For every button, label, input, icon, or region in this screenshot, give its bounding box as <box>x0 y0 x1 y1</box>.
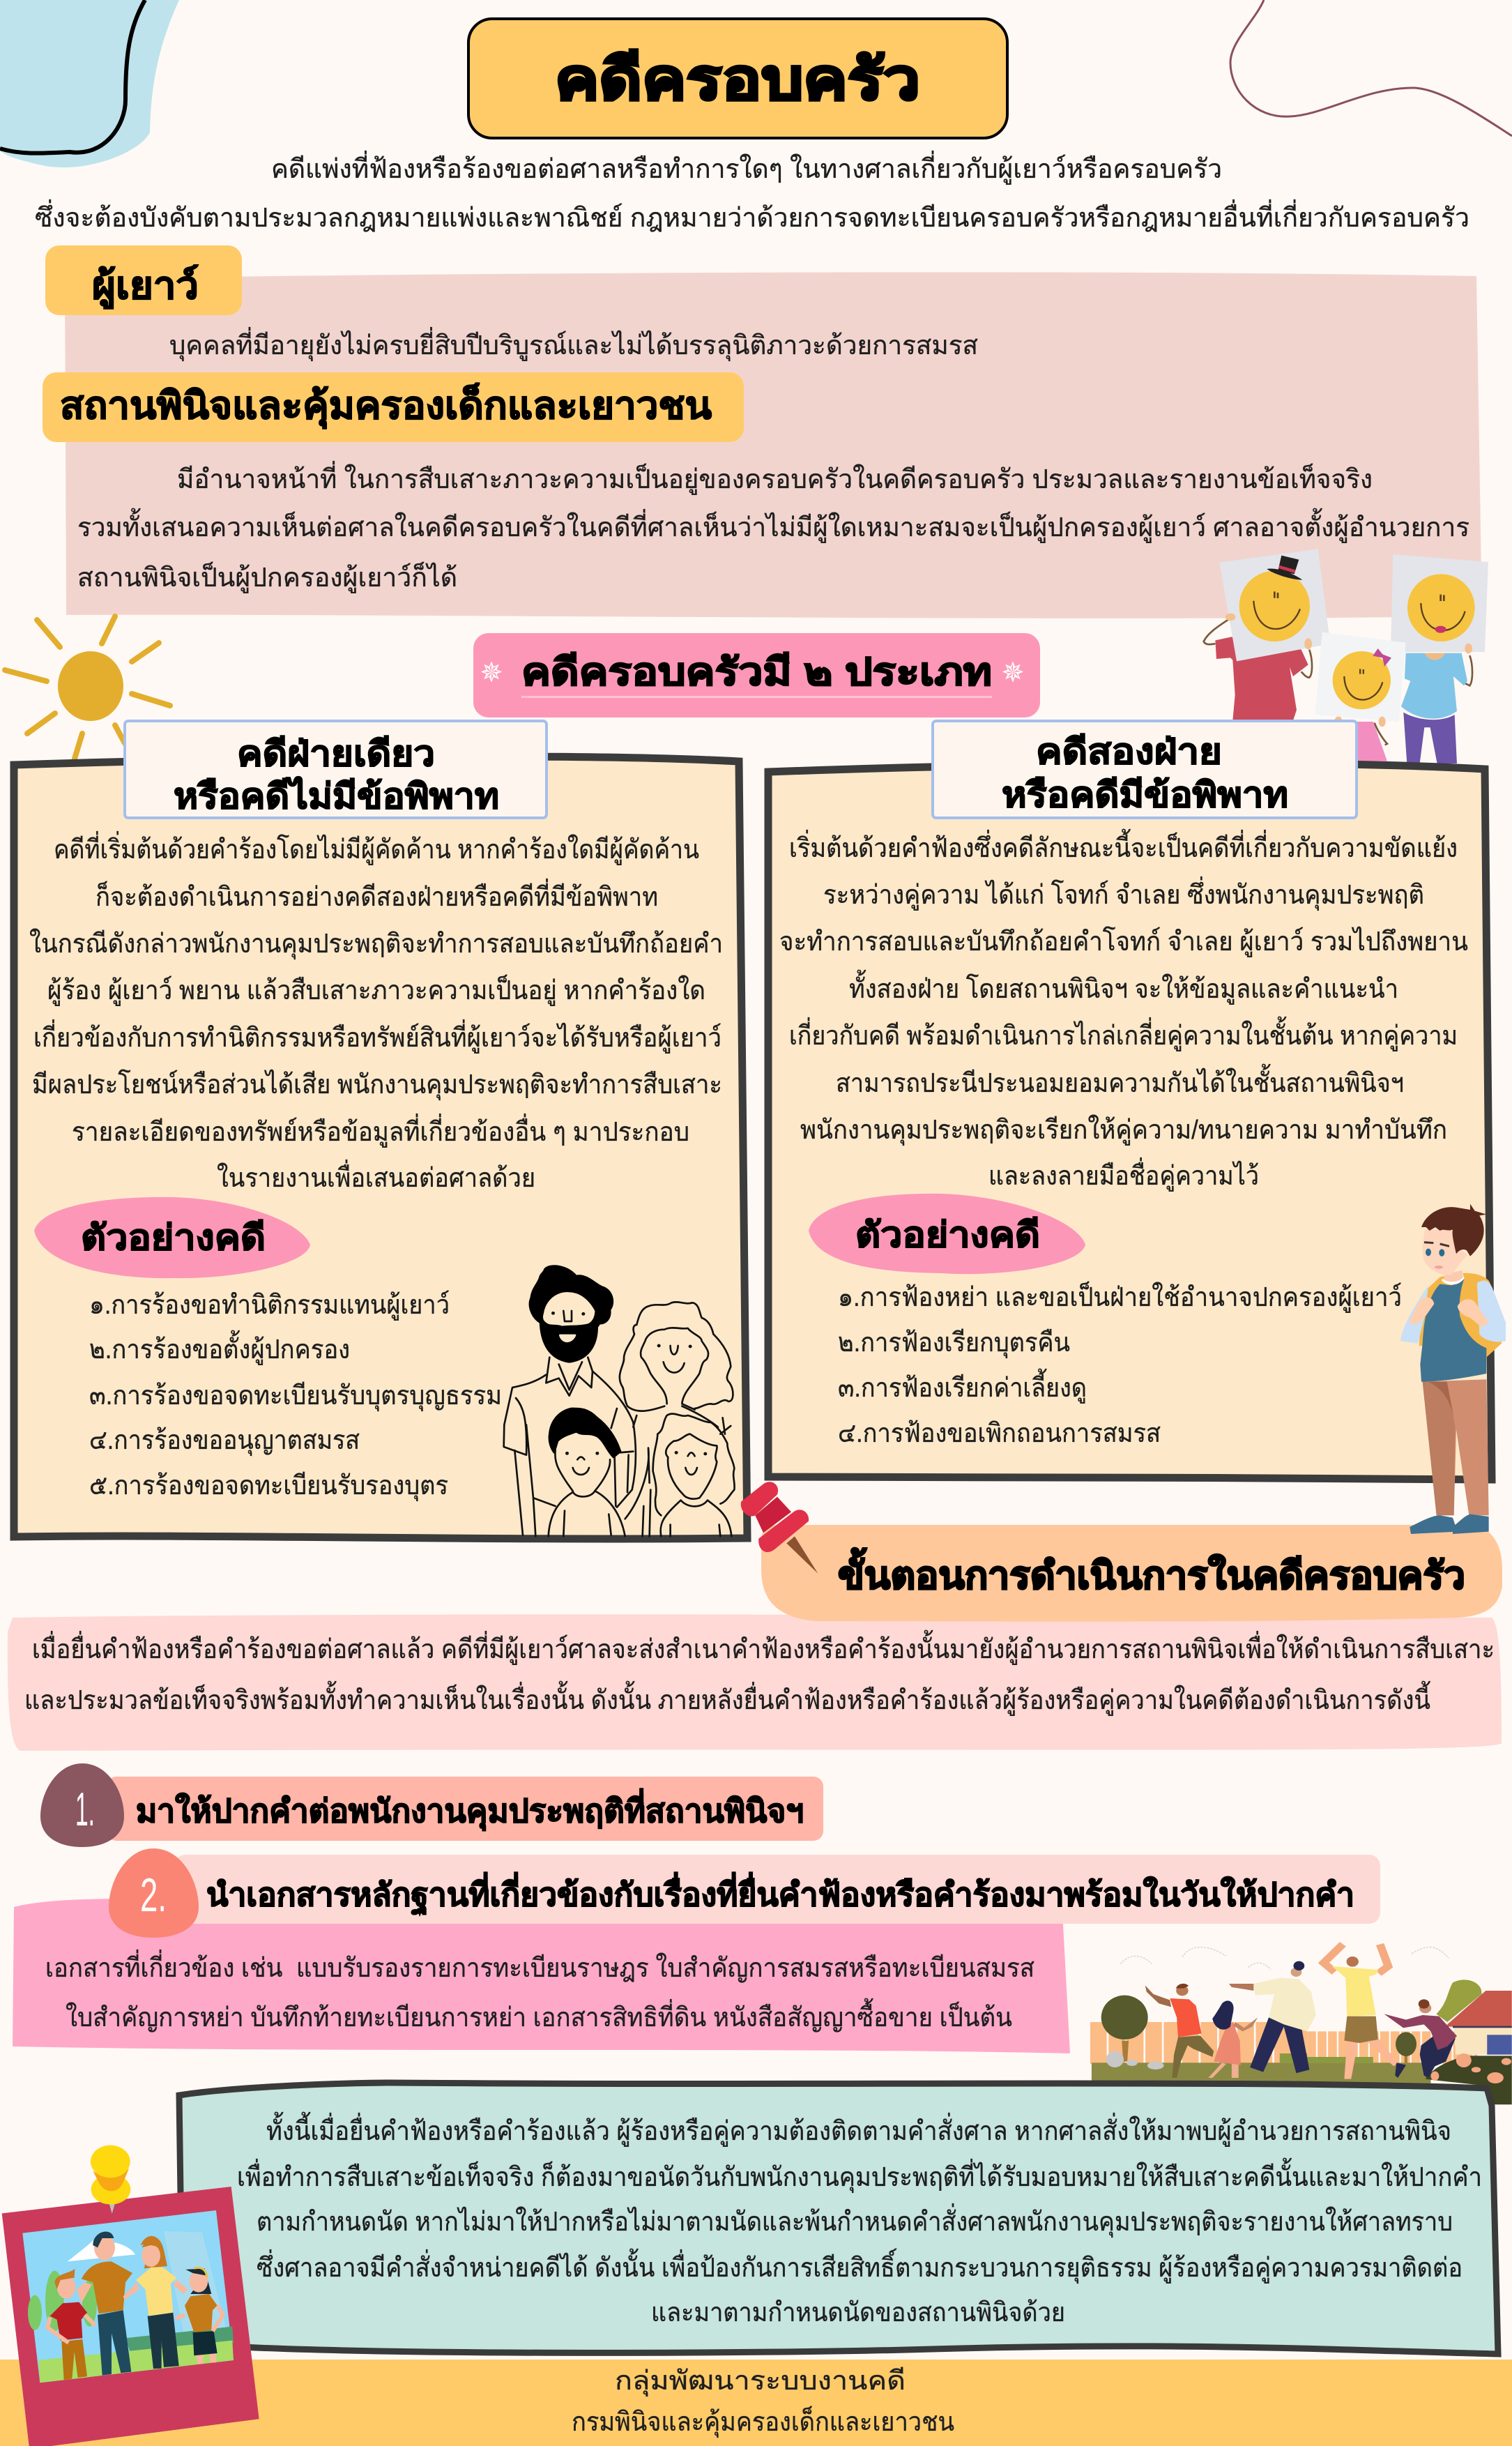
panel header: หรือคดีไม่มีข้อพิพาท <box>174 776 499 816</box>
step 1 badge <box>40 1763 124 1847</box>
icon: sun <box>5 616 170 759</box>
panel header: คดีสองฝ่าย <box>1036 732 1222 771</box>
step 2 badge <box>109 1848 199 1938</box>
list: examples <box>89 1290 502 1501</box>
illustration: line-art family <box>504 1266 735 1536</box>
panel header: หรือคดีมีข้อพิพาท <box>1002 775 1288 814</box>
heading: two types of family cases: ✵ <box>1001 658 1025 688</box>
panel: documents: เอกสารที่เกี่ยวข้อง เช่น แบบรับรองรายการทะเบียนราษฎร ใบสำคัญการสมรสหรือทะเบียนสมรส <box>45 1950 1034 1983</box>
footer band <box>0 2360 1512 2446</box>
text: centre duties: มีอำนาจหน้าที่ ในการสืบเสาะภาวะความเป็นอยู่ของครอบครัวในคดีครอบครัว ประมวลและรายงานข้อเท็จจริง <box>177 461 1373 495</box>
tag: case examples: ตัวอย่างคดี <box>855 1215 1040 1254</box>
heading: family case procedure: ขั้นตอนการดำเนินการในคดีครอบครัว <box>838 1548 1465 1597</box>
text: description: เริ่มต้นด้วยคำฟ้องซึ่งคดีลักษณะนี้จะเป็นคดีที่เกี่ยวกับความขัดแย้ง <box>789 828 1458 863</box>
icon: push pin <box>741 1482 818 1574</box>
list: examples: ๒.การฟ้องเรียกบุตรคืน <box>838 1328 1070 1358</box>
footer band: กลุ่มพัฒนาระบบงานคดี <box>615 2367 906 2396</box>
list: examples: ๕.การร้องขอจดทะเบียนรับรองบุตร <box>89 1471 448 1501</box>
intro text: คดีแพ่งที่ฟ้องหรือร้องขอต่อศาลหรือทำการใดๆ ในทางศาลเกี่ยวกับผู้เยาว์หรือครอบครัว <box>271 151 1222 185</box>
list: examples: ๑.การร้องขอทำนิติกรรมแทนผู้เยาว์ <box>89 1290 450 1321</box>
list: examples: ๑.การฟ้องหย่า และขอเป็นฝ่ายใช้อำนาจปกครองผู้เยาว์ <box>838 1281 1402 1313</box>
icon: yellow pin <box>91 2145 130 2214</box>
text: centre duties: สถานพินิจเป็นผู้ปกครองผู้เยาว์ก็ได้ <box>77 561 457 593</box>
panel header: คดีฝ่ายเดียว <box>237 734 435 773</box>
heading: two types of family cases: ✵ <box>480 658 503 688</box>
panel header <box>933 721 1357 818</box>
panel header <box>125 721 547 818</box>
illustration: family playing in a garden <box>1090 1944 1512 2104</box>
text: description: ทั้งสองฝ่าย โดยสถานพินิจฯ จะให้ข้อมูลและคำแนะนำ <box>849 969 1398 1005</box>
tag: minor <box>45 245 242 315</box>
text: description <box>779 828 1468 1192</box>
text: description: มีผลประโยชน์หรือส่วนได้เสีย พนักงานคุมประพฤติจะทำการสืบเสาะ <box>32 1069 722 1100</box>
list: examples: ๒.การร้องขอตั้งผู้ปกครอง <box>89 1330 350 1365</box>
text: description: ในกรณีดังกล่าวพนักงานคุมประพฤติจะทำการสอบและบันทึกถ้อยคำ <box>29 929 723 959</box>
step 2 badge: 2. <box>140 1869 167 1922</box>
text: centre duties: รวมทั้งเสนอความเห็นต่อศาลในคดีครอบครัวในคดีที่ศาลเห็นว่าไม่มีผู้ใดเหมาะสมจะเป็นผู้ปกครองผู้เยาว์ ศาลอาจตั้งผู้อำนวยการ <box>77 508 1469 543</box>
panel: contested cases <box>768 721 1492 1480</box>
tag: minor: ผู้เยาว์ <box>92 264 199 309</box>
footer band: กรมพินิจและคุ้มครองเด็กและเยาวชน <box>572 2406 954 2438</box>
tag: observation and protection centre: สถานพินิจและคุ้มครองเด็กและเยาวชน <box>60 383 712 430</box>
text: centre duties <box>77 461 1469 593</box>
panel: follow-up notice <box>179 2083 1498 2354</box>
illustration: schoolboy with backpack <box>1400 1204 1506 1534</box>
step 2: นำเอกสารหลักฐานที่เกี่ยวข้องกับเรื่องที่ยื่นคำฟ้องหรือคำร้องมาพร้อมในวันให้ปากคำ <box>206 1872 1354 1915</box>
intro text <box>35 151 1469 233</box>
text: description: พนักงานคุมประพฤติจะเรียกให้คู่ความ/ทนายความ มาทำบันทึก <box>800 1115 1447 1146</box>
list: examples: ๔.การฟ้องขอเพิกถอนการสมรส <box>838 1419 1161 1448</box>
heading: family case procedure <box>761 1525 1502 1622</box>
illustration: children holding smiley signs <box>1204 549 1488 764</box>
decoration: maroon curve top right <box>1230 0 1512 136</box>
step 2 <box>109 1848 1380 1938</box>
panel: definitions <box>43 245 1482 618</box>
tag: case examples <box>34 1197 310 1278</box>
text: description: จะทำการสอบและบันทึกถ้อยคำโจทก์ จำเลย ผู้เยาว์ รวมไปถึงพยาน <box>779 926 1468 957</box>
text: description: และลงลายมือชื่อคู่ความไว้ <box>988 1157 1259 1192</box>
text: description: ระหว่างคู่ความ ได้แก่ โจทก์ จำเลย ซึ่งพนักงานคุมประพฤติ <box>823 876 1424 911</box>
panel: procedure intro <box>8 1614 1502 1751</box>
tag: case examples: ตัวอย่างคดี <box>81 1218 266 1257</box>
intro text: ซึ่งจะต้องบังคับตามประมวลกฎหมายแพ่งและพาณิชย์ กฎหมายว่าด้วยการจดทะเบียนครอบครัวหรือกฎหมายอื่นที่เกี่ยวกับครอบครัว <box>35 199 1469 233</box>
panel: documents: ใบสำคัญการหย่า บันทึกท้ายทะเบียนการหย่า เอกสารสิทธิที่ดิน หนังสือสัญญาซื้อขาย เป็นต้น <box>66 1998 1012 2033</box>
panel: follow-up notice: และมาตามกำหนดนัดของสถานพินิจด้วย <box>651 2298 1065 2327</box>
tag: observation and protection centre <box>43 372 744 442</box>
step 1: มาให้ปากคำต่อพนักงานคุมประพฤติที่สถานพินิจฯ <box>136 1788 804 1831</box>
text: description: เกี่ยวกับคดี พร้อมดำเนินการไกล่เกลี่ยคู่ความในชั้นต้น หากคู่ความ <box>789 1016 1458 1051</box>
list: examples: ๔.การร้องขออนุญาตสมรส <box>89 1426 360 1456</box>
list: examples: ๓.การร้องขอจดทะเบียนรับบุตรบุญธรรม <box>89 1381 502 1411</box>
tag: case examples <box>809 1194 1085 1274</box>
text: description: ก็จะต้องดำเนินการอย่างคดีสองฝ่ายหรือคดีที่มีข้อพิพาท <box>96 879 658 912</box>
step 1 badge: 1. <box>75 1783 95 1836</box>
heading: two types of family cases <box>473 633 1040 717</box>
title: คดีครอบครัว <box>555 48 920 112</box>
text: description: ในรายงานเพื่อเสนอต่อศาลด้วย <box>217 1160 535 1193</box>
text: minor definition: บุคคลที่มีอายุยังไม่ครบยี่สิบปีบริบูรณ์และไม่ได้บรรลุนิติภาวะด้วยการสมรส <box>169 327 978 361</box>
step 1 <box>40 1763 823 1847</box>
list: examples: ๓.การฟ้องเรียกค่าเลี้ยงดู <box>838 1368 1087 1404</box>
text: description <box>29 831 723 1193</box>
panel: ex parte cases <box>14 721 747 1539</box>
illustration: pinned family photo <box>2 2145 259 2446</box>
text: description: เกี่ยวข้องกับการทำนิติกรรมหรือทรัพย์สินที่ผู้เยาว์จะได้รับหรือผู้เยาว์ <box>33 1019 721 1054</box>
text: description: ผู้ร้อง ผู้เยาว์ พยาน แล้วสืบเสาะภาวะความเป็นอยู่ หากคำร้องใด <box>47 974 705 1006</box>
text: description: สามารถประนีประนอมยอมความกันได้ในชั้นสถานพินิจฯ <box>836 1063 1404 1098</box>
text: description: คดีที่เริ่มต้นด้วยคำร้องโดยไม่มีผู้คัดค้าน หากคำร้องใดมีผู้คัดค้าน <box>54 831 699 865</box>
title <box>468 19 1007 138</box>
decoration: blue blob top left <box>0 0 179 167</box>
text: description: รายละเอียดของทรัพย์หรือข้อมูลที่เกี่ยวข้องอื่น ๆ มาประกอบ <box>72 1114 689 1148</box>
heading: two types of family cases: คดีครอบครัวมี ๒ ประเภท <box>521 651 992 693</box>
list: examples <box>838 1281 1402 1448</box>
panel: documents <box>13 1899 1070 2053</box>
